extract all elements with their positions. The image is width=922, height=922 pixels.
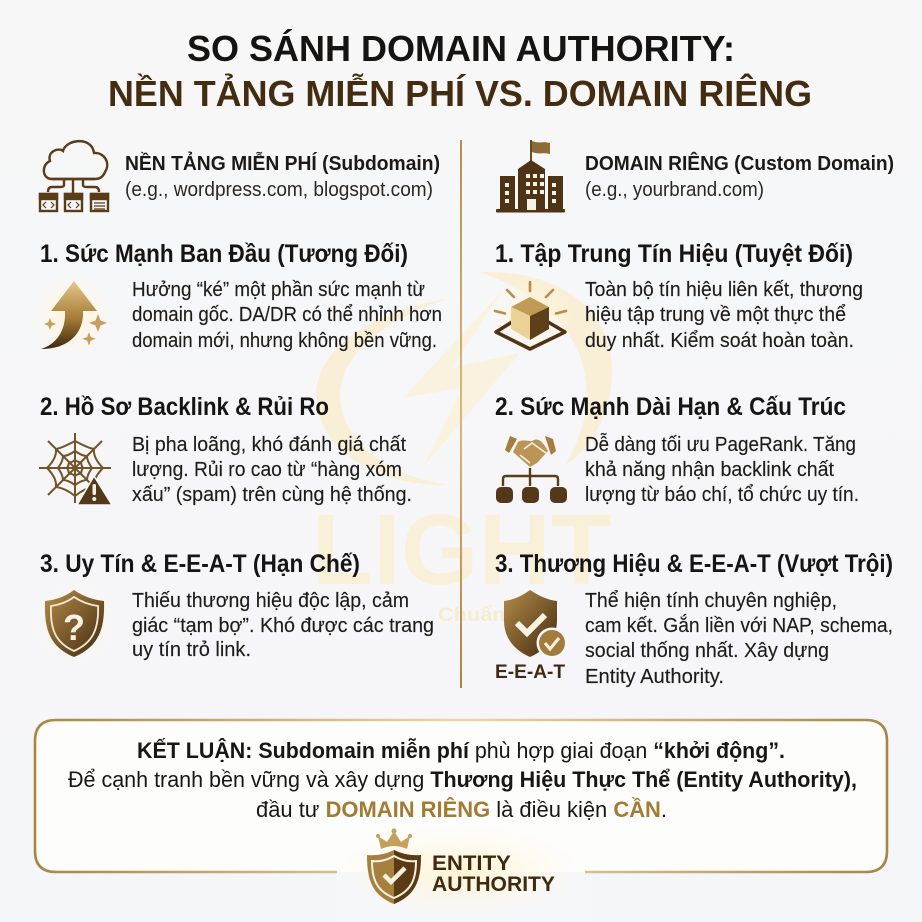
text [585,279,863,352]
text: Thể hiện tính chuyên nghiệp, [585,590,837,612]
text [585,433,859,506]
watermark logo [312,272,612,626]
text: Toàn bộ tín hiệu liên kết, thương [585,279,863,301]
text: giác “tạm bợ”. Khó được các trang [132,615,434,637]
icon: shield with check and E-E-A-T label: E-E-A-T [495,662,565,683]
icon: rising arrow [30,273,114,357]
panel heading: DOMAIN RIÊNG (Custom Domain) [585,151,894,175]
text: Dễ dàng tối ưu PageRank. Tăng [585,433,856,456]
text: duy nhất. Kiểm soát hoàn toàn. [585,330,854,352]
text [585,590,893,688]
panel: conclusion [35,720,887,922]
icon: glowing cube [488,273,572,357]
text: uy tín trỏ link. [132,639,251,661]
panel subheading: (e.g., wordpress.com, blogspot.com) [125,179,433,201]
icon: shield with check and E-E-A-T label [495,590,568,683]
watermark logo: Chuẩn Đơn [438,605,556,626]
item: left 2 backlink profile [39,393,412,506]
conclusion text: đầu tư DOMAIN RIÊNG là điều kiện CẦN. [256,797,667,822]
item: right 2 long-term strength [495,393,859,506]
text: Bị pha loãng, khó đánh giá chất [132,434,406,456]
text: Hưởng “ké” một phần sức mạnh từ [132,279,425,301]
item: left 3 trust eeat [33,550,434,665]
heading: 1. Sức Mạnh Ban Đầu (Tương Đối) [40,240,408,268]
heading: 3. Uy Tín & E-E-A-T (Hạn Chế) [40,550,360,578]
text: social thống nhất. Xây dựng [585,640,829,662]
emblem: entity authority [367,828,555,904]
heading: 2. Sức Mạnh Dài Hạn & Cấu Trúc [495,393,846,421]
panel: domain rieng [496,140,894,212]
emblem: entity authority: ENTITY [432,852,511,875]
heading: 2. Hồ Sơ Backlink & Rủi Ro [40,393,329,421]
text: hiệu tập trung về một thực thể [585,304,846,326]
text: domain mới, nhưng không bền vững. [132,330,437,352]
text: Thiếu thương hiệu độc lập, cảm [132,590,409,612]
icon: building with flag [496,140,565,212]
text: Entity Authority. [585,666,724,688]
item: right 3 brand eeat [495,550,893,688]
conclusion text: KẾT LUẬN: Subdomain miễn phí phù hợp giai đoạn “khởi động”. [137,738,785,763]
panel: free platform subdomain [40,141,440,211]
title: NỀN TẢNG MIỄN PHÍ VS. DOMAIN RIÊNG [108,72,812,114]
conclusion text: Để cạnh tranh bền vững và xây dựng Thương Hiệu Thực Thể (Entity Authority), [68,767,857,792]
text [132,434,412,506]
watermark logo: LIGHT [312,494,612,606]
item: right 1 signal focus [488,240,863,357]
text: lượng. Rủi ro cao từ “hàng xóm [132,459,402,481]
title: SO SÁNH DOMAIN AUTHORITY: [187,28,735,69]
icon: shield with question mark: ? [63,607,85,648]
emblem: entity authority: AUTHORITY [432,873,555,896]
icon: shield with question mark [33,581,117,665]
item: left 1 initial strength [30,240,442,357]
text [132,279,442,352]
title [108,28,812,114]
heading: 1. Tập Trung Tín Hiệu (Tuyệt Đối) [495,240,853,268]
icon: handshake and org chart [496,436,567,503]
text: lượng từ báo chí, tổ chức uy tín. [585,484,859,506]
text: cam kết. Gắn liền với NAP, schema, [585,614,893,637]
panel subheading: (e.g., yourbrand.com) [585,179,764,201]
text: xấu” (spam) trên cùng hệ thống. [132,484,412,506]
text [132,590,434,661]
conclusion text [68,738,857,822]
text: domain gốc. DA/DR có thể nhỉnh hơn [132,304,442,326]
center divider [460,140,462,688]
icon: cloud with browser windows [40,141,108,211]
icon: spider web with warning [39,433,112,505]
panel heading: NỀN TẢNG MIỄN PHÍ (Subdomain) [125,152,440,175]
text: khả năng nhận backlink chất [585,459,834,481]
